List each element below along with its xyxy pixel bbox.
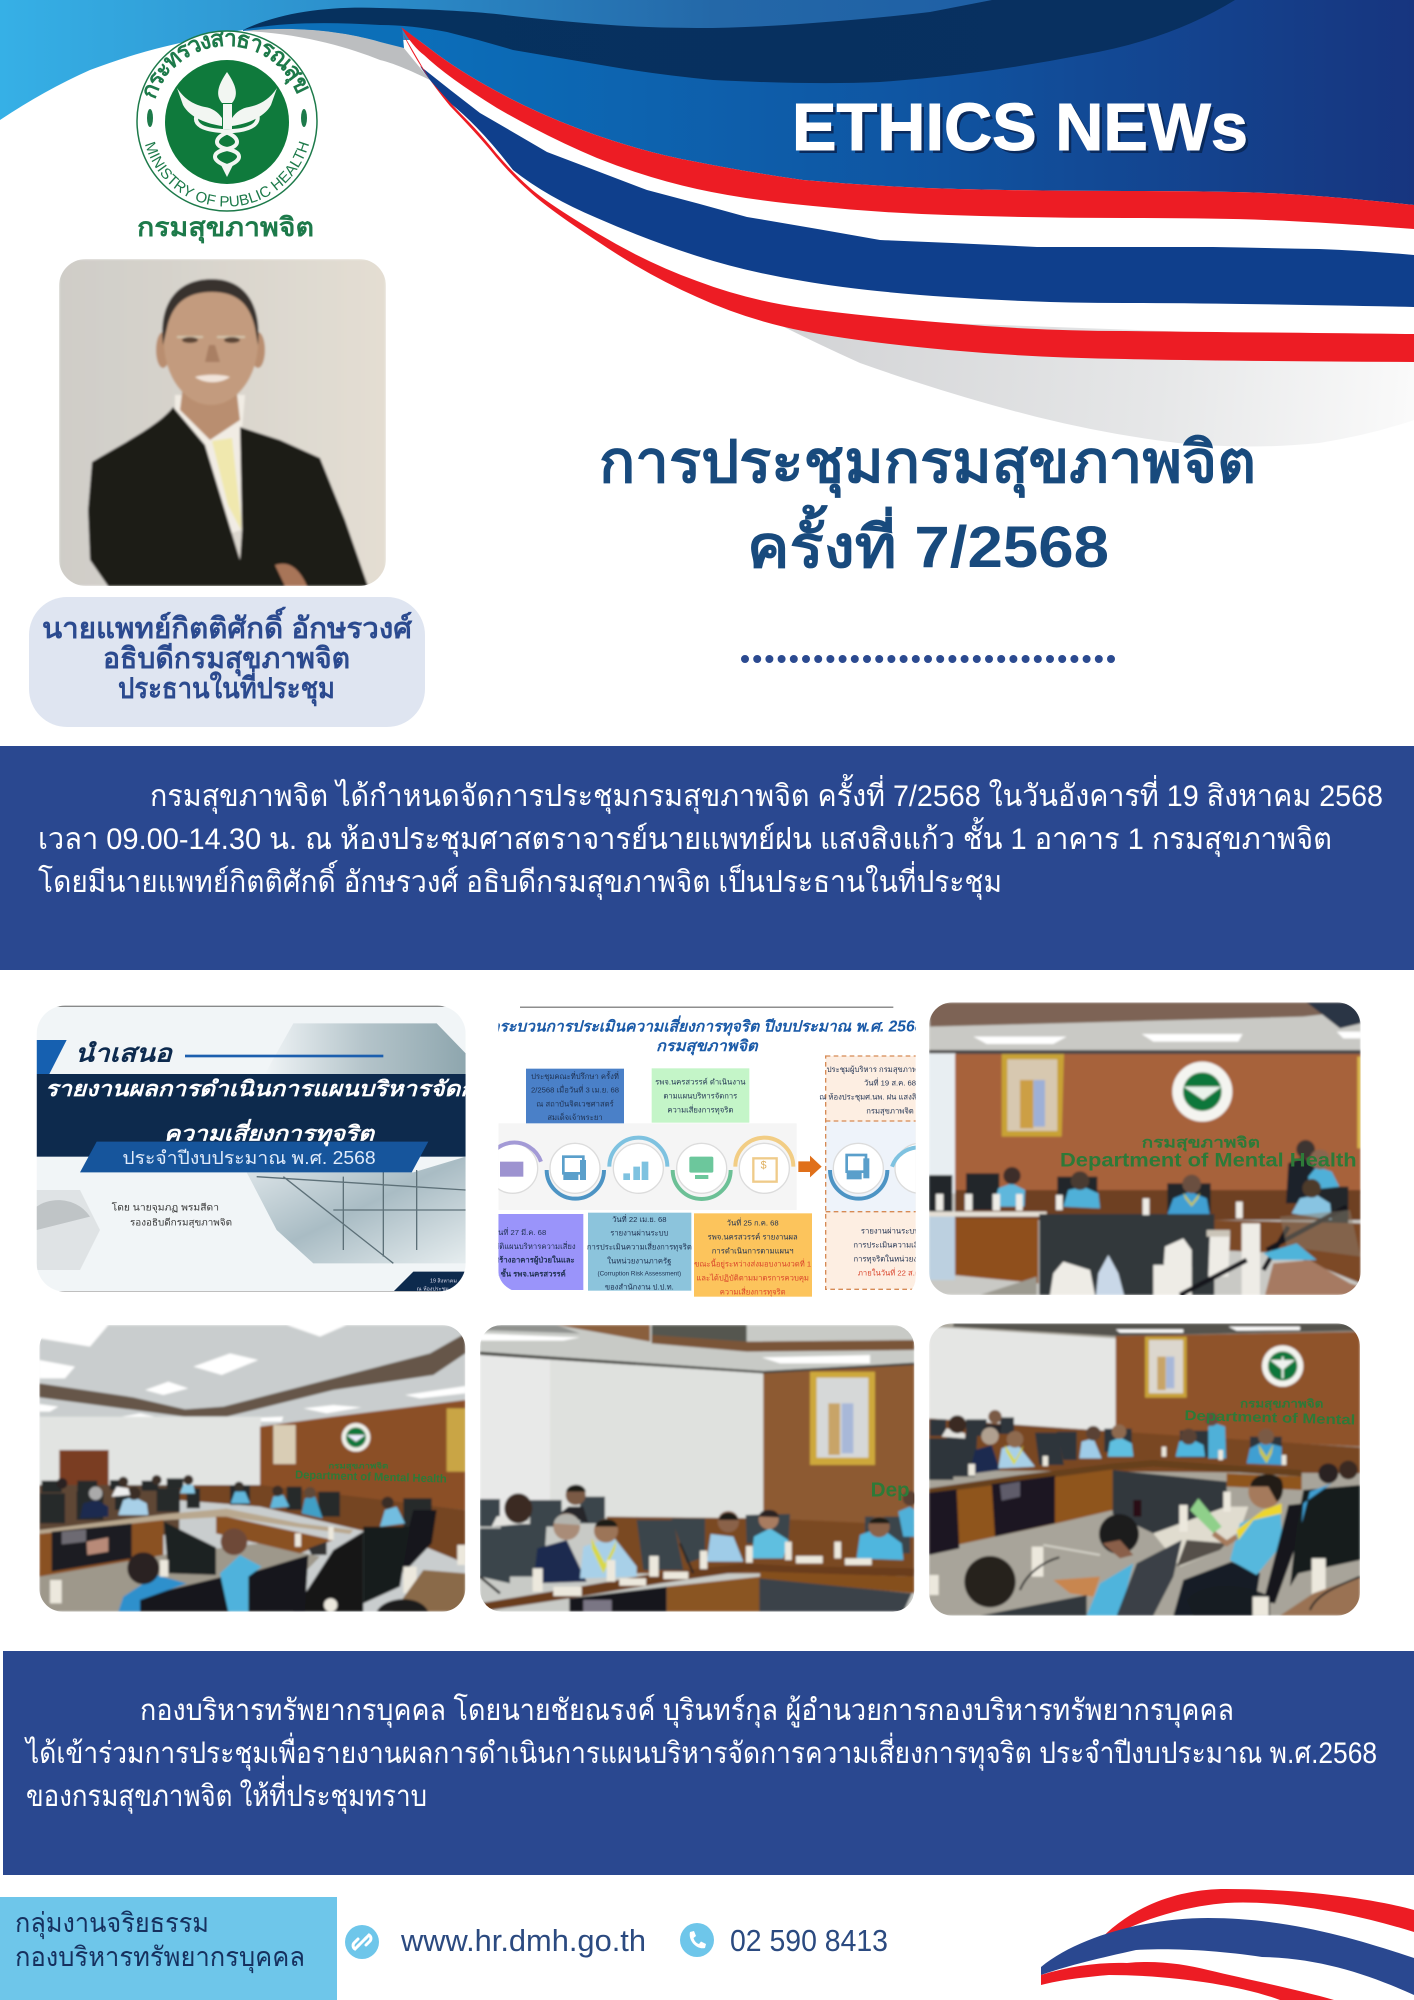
box captions: การทุจริตในหน่วยงาน <box>854 1254 927 1263</box>
standing people <box>1286 1157 1315 1203</box>
wainscot and floor <box>39 1485 179 1535</box>
slide photo: risk assessment process diagram: $ <box>761 1159 767 1171</box>
screen <box>52 1523 132 1572</box>
box captions <box>484 1065 934 1297</box>
grey upper shadow <box>243 29 430 80</box>
wall sign text <box>295 1462 447 1486</box>
head <box>156 332 170 368</box>
back chairs <box>929 1417 1282 1480</box>
slide photo: presentation cover: 19 สิงหาคม <box>430 1278 457 1285</box>
blue ribbon <box>420 66 1414 307</box>
box captions: ณ ห้องประชุมศ.นพ. ฝน แสงสิงแก้ว <box>819 1093 934 1102</box>
box captions: วันที่ 27 มี.ค. 68 <box>494 1227 546 1237</box>
slide text: นำเสนอ <box>75 1041 173 1068</box>
chairman name and title: ประธานในที่ประชุม <box>118 667 335 706</box>
wall sign text <box>1184 1397 1411 1429</box>
chairs <box>929 1173 1348 1223</box>
hand <box>275 564 307 586</box>
portrait photo of chairman <box>59 259 386 586</box>
dotted divider <box>741 655 1115 663</box>
hair <box>162 279 259 345</box>
photo: meeting head table <box>929 1002 1361 1295</box>
wall sign text: กรมสุขภาพจิต <box>328 1462 388 1472</box>
seal green disc <box>165 60 289 184</box>
box captions: ก่อสร้างอาคารผู้ป่วยในและ <box>485 1255 575 1266</box>
tie <box>212 438 241 530</box>
panel: meeting description: เวลา 09.00-14.30 น. ณ ห้องประชุมศาสตราจารย์นายแพทย์ฝน แสงสิงแก้ว ชั้น 1 อาคาร 1 กรมสุขภาพจิต <box>38 817 1332 858</box>
people back row <box>492 1513 530 1527</box>
box captions: อนุมัติแผนบริหารความเสี่ยง <box>484 1241 576 1251</box>
monitor <box>1113 1470 1227 1533</box>
box captions: ภายในวันที่ 22 ส.ค. <box>858 1267 922 1277</box>
panel: meeting description: กรมสุขภาพจิต ได้กำหนดจัดการประชุมกรมสุขภาพจิต ครั้งที่ 7/2568 ในวันอังคารที่ 19 สิงหาคม 2568 <box>150 774 1383 815</box>
foreground <box>293 1532 363 1612</box>
man holding document <box>1173 1562 1260 1616</box>
slide text: ความเสี่ยงการทุจริต <box>164 1119 376 1147</box>
slide photo: presentation cover <box>36 1006 466 1292</box>
name plate pill <box>29 597 425 727</box>
chairs right <box>1263 1503 1303 1603</box>
seal outer ring <box>137 31 317 211</box>
chairman name and title <box>42 606 413 706</box>
wall sign text: Department of Mental Health <box>1184 1407 1380 1429</box>
table <box>929 1212 1047 1217</box>
box captions: 2/2568 เมื่อวันที่ 3 เม.ย. 68 <box>531 1085 619 1095</box>
slide photo: risk assessment process diagram <box>498 1006 916 1297</box>
ETHICS NEWs heading: ETHICS NEWs <box>795 93 1251 168</box>
slide text: รายงานผลการดำเนินการแผนบริหารจัดก <box>45 1077 477 1101</box>
suit <box>88 407 368 586</box>
box captions: 4 ชั้น รพจ.นครสวรรค์ <box>494 1268 566 1279</box>
red ribbon bottom <box>402 32 1414 362</box>
box captions: ความเสี่ยงการทุจริต <box>667 1104 733 1114</box>
wall sign text: Department of Mental Health <box>295 1469 447 1486</box>
diagram title: กรมสุขภาพจิต <box>656 1038 759 1056</box>
box captions: กรมสุขภาพจิต <box>866 1106 914 1115</box>
box captions: รายงานผ่านระบบ <box>610 1229 669 1238</box>
box captions: (Corruption Risk Assessment) <box>597 1271 681 1278</box>
foreground people <box>1087 1563 1133 1616</box>
blue sliver <box>243 22 404 48</box>
light blue corner <box>0 0 1100 120</box>
table <box>929 1460 1302 1495</box>
wall sign text: กรมสุขภาพจิต <box>1240 1397 1323 1411</box>
slide photo: presentation cover: รองอธิบดีกรมสุขภาพจิต <box>130 1216 232 1228</box>
wall sign text: กรมสุขภาพจิต <box>1142 1134 1260 1151</box>
slide text <box>45 1041 477 1147</box>
wall sign text: Department of Mental Health <box>1060 1151 1357 1172</box>
logo: Ministry of Public Health seal <box>136 30 318 212</box>
seal side ornaments <box>147 109 307 127</box>
photo: participants along the wall <box>480 1325 914 1612</box>
table <box>480 1563 914 1612</box>
box captions: ขณะนี้อยู่ระหว่างส่งมอบงานงวดที่ 1 <box>694 1259 811 1269</box>
slide photo: presentation cover: โดย นายจุมภฏ พรมสีดา <box>112 1202 219 1214</box>
chairs <box>480 1497 910 1583</box>
meeting title: ครั้งที่ 7/2568 <box>747 505 1109 580</box>
box captions: วันที่ 25 ก.ค. 68 <box>727 1217 779 1227</box>
panel: meeting description <box>0 746 1414 970</box>
floor <box>929 1513 1167 1616</box>
footer flag ribbons <box>1041 1889 1414 2000</box>
meeting title <box>599 430 1256 580</box>
panel: HR division report: กองบริหารทรัพยากรบุคคล โดยนายชัยณรงค์ บุรินทร์กุล ผู้อำนวยการกองบริหารทรัพยากรบุคคล <box>140 1693 1234 1728</box>
table tops <box>39 1509 353 1534</box>
red ribbon top <box>401 27 1414 229</box>
monitor <box>759 1578 912 1612</box>
icon: link <box>345 1925 379 1959</box>
mouth <box>195 375 230 382</box>
desk right <box>1153 1507 1248 1567</box>
panel: HR division report <box>3 1651 1414 1875</box>
monitor <box>1039 1214 1214 1295</box>
photo: wide view of meeting room <box>39 1325 466 1612</box>
circle steps <box>488 1143 945 1193</box>
footer department box <box>0 1897 337 2000</box>
box captions: ของสำนักงาน ป.ป.ท. <box>605 1282 674 1291</box>
box captions: การประเมินความเสี่ยงการทุจริต <box>587 1241 692 1251</box>
box captions: รายงานผ่านระบบ <box>861 1226 919 1235</box>
seated people <box>994 1183 1025 1207</box>
box captions: วันที่ 22 เม.ย. 68 <box>612 1214 667 1224</box>
box captions: รพจ.นครสวรรค์ รายงานผล <box>708 1232 798 1241</box>
website url: www.hr.dmh.go.th <box>400 1923 646 1958</box>
slide photo: presentation cover: ณ ห้องประชุม <box>417 1286 449 1293</box>
wall sign fragment: Dep <box>871 1479 910 1502</box>
neck and shirt <box>175 395 245 535</box>
diagram title: กระบวนการประเมินความเสี่ยงการทุจริต ปีงบประมาณ พ.ศ. 2568 <box>490 1015 924 1037</box>
seated people <box>80 1500 108 1518</box>
box captions: ณ สถาบันจิตเวชศาสตร์ <box>536 1099 614 1108</box>
glasses <box>177 336 245 338</box>
grey sliver beside ribbon <box>457 70 540 115</box>
diagram title <box>490 1015 924 1056</box>
bottles and accessories <box>936 1194 1260 1295</box>
box captions: สมเด็จเจ้าพระยา <box>547 1112 603 1122</box>
panel: meeting description: โดยมีนายแพทย์กิตติศักดิ์ อักษรวงศ์ อธิบดีกรมสุขภาพจิต เป็นประธานในที่ประชุม <box>38 860 1002 901</box>
items <box>533 1542 872 1596</box>
box captions: ความเสี่ยงการทุจริต <box>720 1287 786 1297</box>
wainscot <box>955 1190 1361 1220</box>
grey lower shadow <box>780 320 1414 446</box>
chairman name and title: อธิบดีกรมสุขภาพจิต <box>103 643 350 676</box>
monitor <box>164 1522 216 1575</box>
bottles <box>929 1447 1326 1616</box>
ETHICS NEWs heading: ETHICS NEWs <box>792 90 1248 165</box>
box captions: และได้ปฏิบัติตามมาตรการควบคุม <box>696 1274 809 1283</box>
arrow <box>798 1156 822 1177</box>
chairman name and title: นายแพทย์กิตติศักดิ์ อักษรวงศ์ <box>42 606 413 645</box>
photo: participants with man holding document <box>929 1323 1360 1616</box>
back row <box>40 1476 433 1528</box>
panel: HR division report: ของกรมสุขภาพจิต ให้ที่ประชุมทราบ <box>26 1775 427 1814</box>
process boxes <box>526 1069 624 1123</box>
navy band <box>243 0 1235 83</box>
box captions: วันที่ 19 ส.ค. 68 <box>864 1078 916 1088</box>
people front row <box>533 1540 587 1583</box>
wall sign text <box>1060 1134 1357 1172</box>
box captions: ในหน่วยงานภาครัฐ <box>607 1256 671 1265</box>
box captions: การดำเนินการตามแผนฯ <box>712 1246 794 1255</box>
footer department box: กลุ่มงานจริยธรรม <box>15 1908 209 1940</box>
icon: phone <box>680 1923 714 1957</box>
box captions: ตามแผนบริหารจัดการ <box>663 1091 737 1100</box>
ring text English: MINISTRY OF PUBLIC HEALTH <box>145 141 309 206</box>
back people <box>942 1428 965 1438</box>
box captions: รพจ.นครสวรรค์ ดำเนินงาน <box>655 1078 746 1087</box>
footer department box: กองบริหารทรัพยากรบุคคล <box>15 1942 305 1974</box>
box captions: การประเมินความเสี่ยง <box>853 1239 927 1249</box>
main blue field <box>380 0 1414 205</box>
header wave with Thai flag ribbons <box>0 0 1414 446</box>
ring text Thai: กระทรวงสาธารณสุข <box>144 32 309 99</box>
meeting title: การประชุมกรมสุขภาพจิต <box>599 430 1256 499</box>
box captions: ประชุมคณะที่ปรึกษา ครั้งที่ <box>531 1071 619 1081</box>
department name under logo: กรมสุขภาพจิต <box>137 212 314 244</box>
box captions: ประชุมผู้บริหาร กรมสุขภาพจิต <box>827 1065 927 1074</box>
slide photo: presentation cover: ประจำปีงบประมาณ พ.ศ. 2568 <box>122 1148 376 1168</box>
caduceus emblem <box>177 72 277 177</box>
